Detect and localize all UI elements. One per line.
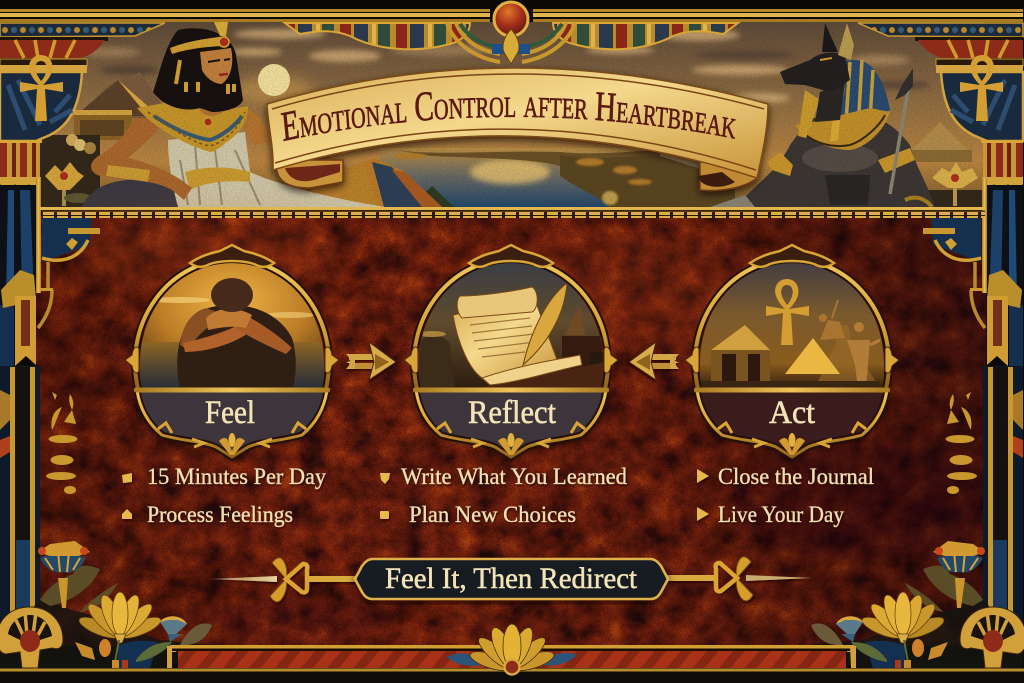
- bullet list: Act: Live Your Day: [718, 502, 844, 527]
- bullet: [697, 507, 709, 521]
- wing texture: [8, 80, 72, 130]
- bullet list: Reflect: Write What You Learned: [401, 464, 627, 489]
- beaded frieze: [0, 23, 165, 37]
- armband: [767, 152, 793, 176]
- bullet: [697, 469, 709, 483]
- torso: [735, 118, 935, 207]
- medallion: Feel: [125, 245, 339, 457]
- banner scene: [40, 22, 987, 208]
- fabric under scroll: [310, 158, 442, 207]
- temple: [74, 110, 132, 140]
- bottom left corner ornaments: [0, 541, 215, 670]
- bottom striped band: [170, 645, 856, 668]
- bullet: [380, 511, 389, 519]
- ankh in picture: [766, 279, 809, 345]
- river landscape: [380, 148, 735, 208]
- icon: ankh on shield: [20, 55, 63, 121]
- fan ornament: [0, 607, 63, 668]
- hair beads: [176, 60, 234, 94]
- banner plate: [416, 390, 606, 457]
- hieroglyph column: [46, 392, 78, 494]
- collar: [137, 102, 248, 152]
- banner plate: [697, 390, 887, 457]
- bullet: [380, 473, 390, 484]
- lappets: [798, 90, 820, 138]
- headband: [170, 36, 229, 54]
- face: [200, 48, 232, 84]
- gold rail under banner: [40, 207, 985, 218]
- bullet: [122, 509, 132, 519]
- title scroll: [267, 68, 768, 190]
- bullet list: Feel: Process Feelings: [147, 502, 293, 527]
- bullet list: Feel: 15 Minutes Per Day: [147, 464, 326, 489]
- curtain: [0, 185, 36, 390]
- picture: scroll and quill: [419, 263, 603, 388]
- big lotus: [77, 592, 163, 662]
- hanging tab: [15, 296, 36, 366]
- bullet list: Act: Close the Journal: [718, 464, 874, 489]
- heading: Reflect: [468, 395, 556, 431]
- gold rails: [0, 9, 490, 22]
- lower column: [0, 366, 40, 643]
- dark foliage: [0, 600, 215, 670]
- frame: [685, 245, 899, 457]
- clouds: [80, 29, 910, 103]
- scroll curls: [276, 160, 343, 188]
- arcs: [447, 23, 500, 62]
- sun: [234, 76, 314, 104]
- bullet list: Act: [697, 464, 874, 527]
- heading: Act: [769, 395, 815, 431]
- bottom right corner ornaments: [808, 541, 1024, 670]
- striped drape: [285, 23, 470, 49]
- dress: [168, 132, 385, 207]
- bullet: [122, 473, 132, 483]
- right flower: [928, 162, 982, 207]
- spear: [890, 90, 908, 194]
- red sphere: [494, 2, 528, 36]
- fringe: [0, 177, 41, 195]
- picture: ankh, pyramid and figures: [700, 263, 884, 388]
- banner plate: [137, 390, 327, 457]
- title: Emotional Control after Heartbreak: [280, 92, 736, 142]
- bottom gold line: [0, 668, 1024, 683]
- top border right half: [533, 9, 1023, 643]
- neck: [815, 82, 845, 122]
- medallion: Act: [685, 245, 899, 457]
- left spear and bow: [211, 558, 363, 602]
- left mountains and pyramid: [91, 72, 160, 118]
- hair: [153, 28, 243, 112]
- papyrus: [38, 541, 90, 608]
- gold drop: [503, 29, 519, 64]
- column stripes: [0, 143, 40, 178]
- motto plate: [355, 559, 668, 599]
- blue and olive leaves: [40, 569, 100, 606]
- collar: [795, 108, 890, 150]
- headdress: [840, 60, 890, 116]
- frame: [404, 245, 618, 457]
- bullet list: Reflect: [380, 464, 627, 527]
- picture: man with head in arms: [140, 263, 324, 388]
- left flowers: [40, 134, 100, 207]
- Anubis: [710, 23, 935, 208]
- torso and arms: [91, 118, 192, 200]
- right spear and bow: [661, 557, 812, 601]
- corner bracket: [38, 218, 100, 328]
- bullet list: Reflect: Plan New Choices: [409, 502, 576, 527]
- buds: [75, 639, 128, 668]
- motto text: Feel It, Then Redirect: [385, 562, 638, 595]
- couch: [82, 180, 178, 207]
- ears: [822, 23, 838, 52]
- arrow: Act to Reflect: [629, 342, 679, 380]
- medallion: Reflect: [404, 245, 618, 457]
- scroll body: [267, 68, 768, 178]
- head: [780, 53, 850, 92]
- Cleopatra: [82, 22, 385, 207]
- title: [280, 92, 736, 142]
- arrow: Feel to Reflect: [346, 342, 396, 380]
- bottom center lotus: [447, 624, 577, 675]
- frame: [125, 245, 339, 457]
- vertical gold post: [36, 178, 41, 293]
- bullet list: Feel: [122, 464, 326, 527]
- top border left half: [0, 9, 490, 643]
- small papyrus: [160, 616, 212, 645]
- top center ornament: [447, 2, 575, 64]
- shield panel: [0, 72, 82, 141]
- lintel red fan: [0, 37, 108, 58]
- right distant pyramid: [912, 122, 972, 162]
- red stone panel: [36, 216, 990, 646]
- band corner: [167, 646, 178, 668]
- belt: [185, 168, 250, 190]
- heading: Feel: [205, 395, 255, 431]
- bottom motto ribbon: [211, 557, 812, 602]
- capital: [0, 59, 87, 73]
- dark cloud streaks: [100, 51, 930, 89]
- neck: [198, 108, 225, 116]
